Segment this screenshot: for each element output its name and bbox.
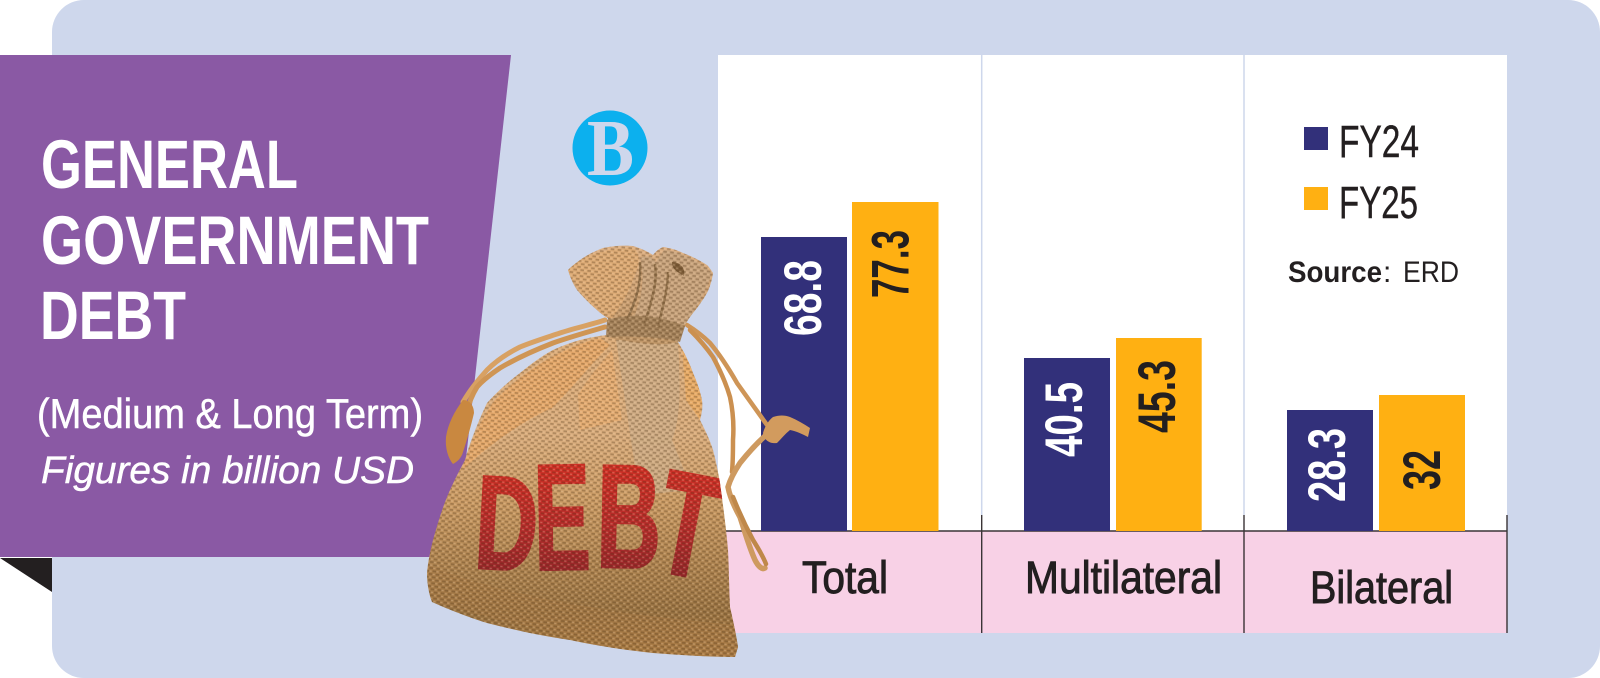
bar: Multilateral FY25 xyxy=(1116,338,1202,531)
label: Bilateral: Bilateral xyxy=(1310,562,1453,613)
category strip xyxy=(718,531,1507,633)
bar: Bilateral FY24: 28.3 xyxy=(1298,428,1357,502)
heading: GOVERNMENT xyxy=(41,202,429,279)
source: Source xyxy=(1288,256,1382,289)
legend xyxy=(1304,116,1419,228)
sack weave texture xyxy=(427,335,738,657)
sack lettering: T xyxy=(644,439,732,610)
bar: Bilateral FY25 xyxy=(1379,395,1465,531)
group: Bilateral xyxy=(1287,395,1465,613)
sack body xyxy=(427,335,738,657)
bar: Multilateral FY24: 40.5 xyxy=(1035,382,1094,457)
subtitle: (Medium & Long Term) xyxy=(37,390,423,437)
right drawstring xyxy=(687,325,810,569)
bar: Multilateral FY24 xyxy=(1024,358,1110,531)
label: Multilateral: Multilateral xyxy=(1025,552,1222,603)
icon: debt sack xyxy=(427,246,810,657)
sack lettering: D xyxy=(472,448,542,599)
source: ERD xyxy=(1403,256,1459,289)
label: Total: Total xyxy=(802,552,888,603)
heading: GENERAL xyxy=(41,126,298,203)
title banner xyxy=(0,55,511,592)
left drawstring xyxy=(446,320,605,464)
bar: Bilateral FY24 xyxy=(1287,410,1373,531)
legend: FY25: FY25 xyxy=(1339,177,1418,228)
bar: Total FY25: 77.3 xyxy=(862,230,920,298)
sack lettering xyxy=(478,464,722,578)
chart background xyxy=(718,55,1507,531)
chart xyxy=(718,55,1507,633)
heading: DEBT xyxy=(40,277,186,354)
bar: Total FY24 xyxy=(761,237,847,531)
legend: FY24: FY24 xyxy=(1339,116,1419,167)
group: Multilateral xyxy=(1024,338,1222,603)
sack neck and ruffle xyxy=(568,246,713,344)
bar: Total FY24: 68.8 xyxy=(774,260,833,336)
sack lettering: E xyxy=(533,433,591,601)
units note: Figures in billion USD xyxy=(41,450,414,492)
banner fold xyxy=(0,558,52,592)
banner shape xyxy=(0,55,511,557)
bar: Bilateral FY25: 32 xyxy=(1393,450,1452,490)
bar: Multilateral FY25: 45.3 xyxy=(1128,360,1187,433)
heading xyxy=(40,126,429,354)
group: Total xyxy=(761,202,938,603)
source xyxy=(1288,256,1459,289)
sack lettering: B xyxy=(596,434,662,599)
sack highlights xyxy=(428,338,740,657)
source: : xyxy=(1383,256,1391,289)
bar: Total FY25 xyxy=(852,202,938,531)
logo: B xyxy=(587,105,634,193)
